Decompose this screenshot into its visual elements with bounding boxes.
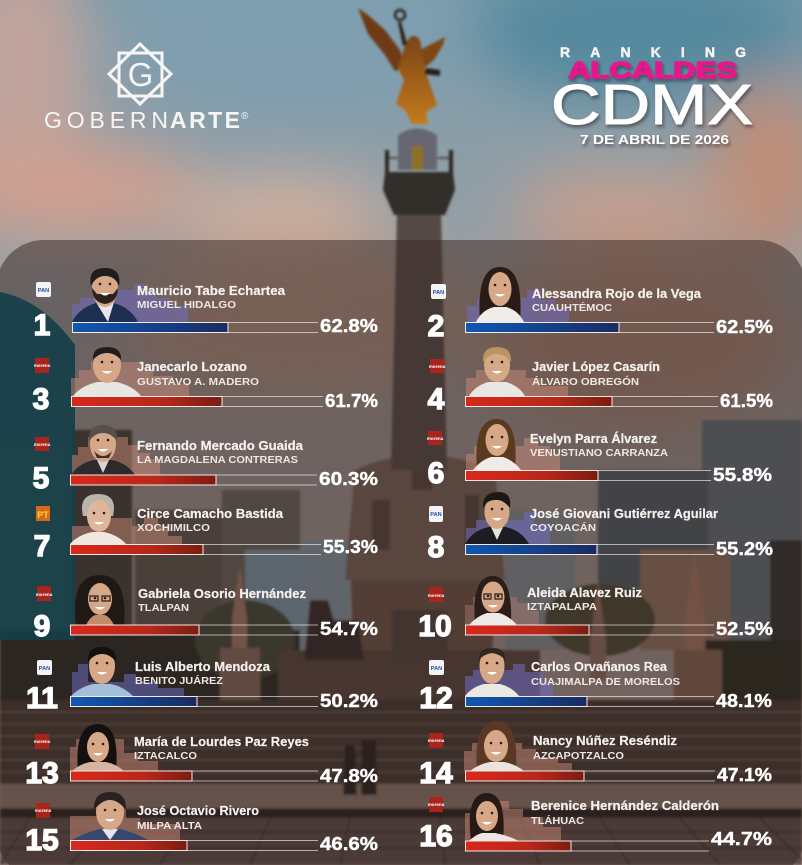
portrait — [75, 575, 124, 625]
candidate 12: Carlos Orvañanos Rea — [419, 648, 772, 715]
trees and obelisks — [0, 559, 802, 702]
party logo Morena — [36, 586, 53, 601]
candidate 4: Javier López Casarín: 4 — [428, 383, 445, 416]
bar 55.2% — [465, 544, 714, 554]
candidate 10: Aleida Alavez Ruiz: IZTAPALAPA — [527, 601, 597, 613]
bar 55.8% — [465, 470, 711, 480]
candidate 4: Javier López Casarín: 61.5% — [720, 391, 773, 411]
candidate 10: Aleida Alavez Ruiz: 52.5% — [716, 619, 773, 639]
candidate 9: Gabriela Osorio Hernández: Gabriela Osorio Hernández — [138, 587, 306, 601]
bar 50.2% — [70, 696, 318, 706]
portrait — [466, 419, 560, 470]
bar 61.5% — [465, 396, 718, 406]
candidate 10: Aleida Alavez Ruiz: Aleida Alavez Ruiz — [527, 586, 642, 600]
candidate 7: Circe Camacho Bastida: 55.3% — [323, 537, 378, 557]
city buildings — [75, 419, 802, 652]
candidate 14: Nancy Núñez Reséndiz: 47.1% — [717, 765, 772, 785]
candidate 3: Janecarlo Lozano: 61.7% — [325, 391, 378, 411]
portrait — [71, 647, 184, 696]
bar 52.5% — [465, 625, 714, 635]
candidate 3: Janecarlo Lozano — [33, 347, 378, 416]
party logo Morena: morena — [428, 738, 445, 743]
candidate 11: Luis Alberto Mendoza: Luis Alberto Mendoza — [135, 660, 271, 674]
candidate 11: Luis Alberto Mendoza: 11 — [26, 682, 58, 715]
bar 46.6% — [70, 840, 318, 850]
candidate 1: Mauricio Tabe Echartea — [34, 268, 378, 342]
bar 62.5% — [465, 322, 714, 332]
portrait — [465, 793, 561, 841]
steps and plaza — [0, 700, 802, 865]
Winged Victory statue — [358, 8, 445, 124]
party logo Morena: morena — [36, 592, 53, 597]
candidate 4: Javier López Casarín: Javier López Casarín — [532, 360, 660, 374]
portrait — [70, 494, 182, 544]
candidate 5: Fernando Mercado Guaida: 5 — [33, 462, 49, 495]
candidate 6: Evelyn Parra Álvarez: Evelyn Parra Álvarez — [530, 431, 657, 446]
candidate 1: Mauricio Tabe Echartea: 62.8% — [320, 316, 378, 336]
monument base — [278, 440, 540, 700]
candidate 5: Fernando Mercado Guaida: 60.3% — [319, 469, 378, 489]
candidate 8: José Giovani Gutiérrez Aguilar — [428, 492, 773, 564]
candidate 14: Nancy Núñez Reséndiz: Nancy Núñez Reséndiz — [533, 734, 677, 748]
candidate 16: Berenice Hernández Calderón: 44.7% — [711, 829, 772, 849]
party logo PAN — [37, 660, 52, 675]
candidate 15: José Octavio Rivero: MILPA ALTA — [137, 820, 202, 832]
portrait — [70, 792, 180, 840]
party logo Morena — [34, 734, 51, 749]
title: Ranking Alcaldes CDMX: ALCALDES — [568, 57, 737, 83]
candidate 10: Aleida Alavez Ruiz — [418, 576, 773, 643]
candidate 12: Carlos Orvañanos Rea: Carlos Orvañanos Rea — [531, 660, 668, 674]
candidate 15: José Octavio Rivero: José Octavio Rivero — [137, 804, 259, 818]
bar 60.3% — [70, 475, 317, 485]
party logo Morena: morena — [35, 808, 52, 813]
title: Ranking Alcaldes CDMX: CDMX — [551, 73, 753, 137]
wordmark: ® — [241, 111, 249, 122]
portrait — [465, 492, 550, 544]
candidate 6: Evelyn Parra Álvarez: VENUSTIANO CARRANZA — [530, 447, 668, 459]
candidate 9: Gabriela Osorio Hernández: 9 — [34, 610, 50, 643]
candidate 7: Circe Camacho Bastida: Circe Camacho Bastida — [137, 507, 284, 521]
party logo PAN: PAN — [431, 666, 442, 672]
candidate 3: Janecarlo Lozano: GUSTAVO A. MADERO — [137, 376, 259, 388]
title: Ranking Alcaldes CDMX: RANKING — [560, 44, 746, 60]
candidate 2: Alessandra Rojo de la Vega — [428, 267, 773, 343]
bar 47.1% — [465, 771, 715, 781]
candidate 6: Evelyn Parra Álvarez: 6 — [428, 457, 444, 490]
candidate 13: María de Lourdes Paz Reyes: IZTACALCO — [134, 750, 197, 762]
candidate 12: Carlos Orvañanos Rea: 48.1% — [716, 691, 772, 711]
candidate 2: Alessandra Rojo de la Vega: Alessandra Rojo de la Vega — [532, 287, 702, 301]
title: Ranking Alcaldes CDMX: 7 DE ABRIL DE 2026 — [580, 132, 729, 147]
wordmark — [44, 107, 249, 133]
candidate 15: José Octavio Rivero: 46.6% — [320, 834, 378, 854]
bar 48.1% — [465, 696, 714, 706]
candidate 8: José Giovani Gutiérrez Aguilar: 55.2% — [716, 539, 773, 559]
party logo PT: PT — [37, 510, 49, 520]
candidate 12: Carlos Orvañanos Rea: CUAJIMALPA DE MORELOS — [531, 676, 680, 688]
portrait — [467, 267, 569, 322]
party logo Morena — [427, 431, 444, 445]
candidate 3: Janecarlo Lozano: 3 — [33, 383, 49, 416]
candidate 4: Javier López Casarín — [428, 347, 773, 416]
wordmark: GOBERN — [44, 107, 168, 133]
candidate 16: Berenice Hernández Calderón — [419, 793, 772, 853]
candidate 14: Nancy Núñez Reséndiz — [419, 721, 772, 790]
candidate 1: Mauricio Tabe Echartea: MIGUEL HIDALGO — [137, 299, 236, 311]
party logo Morena — [428, 797, 445, 812]
candidate 16: Berenice Hernández Calderón: Berenice Hernández Calderón — [531, 799, 719, 813]
icon: diamond G emblem — [109, 44, 171, 104]
candidate 5: Fernando Mercado Guaida: Fernando Mercado Guaida — [137, 439, 304, 453]
candidate 16: Berenice Hernández Calderón: 16 — [419, 820, 453, 853]
portrait — [70, 724, 178, 771]
candidate 6: Evelyn Parra Álvarez: 55.8% — [713, 465, 772, 485]
party logo Morena — [34, 437, 51, 451]
party logo PAN — [431, 284, 446, 299]
candidate 1: Mauricio Tabe Echartea: 1 — [34, 309, 50, 342]
party logo PT — [36, 506, 50, 521]
candidate 9: Gabriela Osorio Hernández: 54.7% — [320, 619, 378, 639]
logo: Gobernarte — [44, 44, 249, 133]
monument column — [383, 128, 455, 470]
candidate 2: Alessandra Rojo de la Vega: 2 — [428, 310, 444, 343]
panel: translucent rankings background — [0, 240, 802, 865]
candidate 12: Carlos Orvañanos Rea: 12 — [419, 682, 453, 715]
party logo Morena — [34, 358, 51, 373]
party logo Morena: morena — [429, 364, 446, 369]
party logo Morena — [428, 733, 445, 748]
candidate 1: Mauricio Tabe Echartea: Mauricio Tabe Echartea — [137, 284, 286, 298]
candidate 15: José Octavio Rivero — [25, 792, 378, 857]
candidate 13: María de Lourdes Paz Reyes: 47.8% — [320, 766, 378, 786]
candidate 16: Berenice Hernández Calderón: TLÁHUAC — [531, 814, 584, 827]
party logo PAN: PAN — [38, 288, 49, 294]
portrait — [71, 425, 160, 475]
candidate 7: Circe Camacho Bastida: 7 — [34, 530, 50, 563]
party logo Morena — [429, 359, 446, 373]
party logo Morena: morena — [428, 593, 445, 598]
candidate 11: Luis Alberto Mendoza: BENITO JUÁREZ — [135, 674, 224, 687]
party logo PAN: PAN — [39, 666, 50, 672]
party logo Morena: morena — [34, 363, 51, 368]
party logo Morena: morena — [428, 802, 445, 807]
candidate 14: Nancy Núñez Reséndiz: 14 — [419, 757, 453, 790]
bar 54.7% — [70, 625, 318, 635]
candidate 6: Evelyn Parra Álvarez — [427, 419, 772, 490]
portrait — [72, 268, 188, 322]
bar 47.8% — [70, 771, 318, 781]
party logo PAN — [429, 660, 444, 675]
title: Ranking Alcaldes CDMX — [551, 44, 753, 147]
left teal tower — [0, 292, 75, 640]
candidate 8: José Giovani Gutiérrez Aguilar: COYOACÁN — [530, 521, 596, 534]
portrait — [464, 721, 572, 771]
bar 44.7% — [465, 841, 709, 851]
candidate 8: José Giovani Gutiérrez Aguilar: José Giovani Gutiérrez Aguilar — [530, 507, 718, 521]
candidate 10: Aleida Alavez Ruiz: 10 — [418, 610, 452, 643]
candidate 8: José Giovani Gutiérrez Aguilar: 8 — [428, 531, 444, 564]
portrait — [466, 347, 568, 396]
bar 55.3% — [70, 544, 321, 554]
candidate 14: Nancy Núñez Reséndiz: AZCAPOTZALCO — [533, 750, 624, 762]
portrait — [465, 576, 539, 625]
candidate 11: Luis Alberto Mendoza: 50.2% — [320, 691, 378, 711]
candidate 5: Fernando Mercado Guaida: LA MAGDALENA CONTRERAS — [137, 454, 298, 466]
candidate 5: Fernando Mercado Guaida — [33, 425, 378, 495]
candidate 13: María de Lourdes Paz Reyes: María de Lourdes Paz Reyes — [134, 735, 309, 749]
candidate 3: Janecarlo Lozano: Janecarlo Lozano — [137, 360, 247, 374]
candidate 13: María de Lourdes Paz Reyes: 13 — [25, 757, 59, 790]
party logo Morena: morena — [34, 442, 51, 447]
bar 62.8% — [72, 322, 318, 332]
icon: diamond G emblem: G — [128, 56, 153, 93]
party logo PAN — [429, 506, 443, 522]
party logo Morena — [35, 803, 52, 818]
candidate 7: Circe Camacho Bastida: XOCHIMILCO — [137, 522, 210, 534]
candidate 9: Gabriela Osorio Hernández: TLALPAN — [138, 602, 189, 614]
candidate 2: Alessandra Rojo de la Vega: CUAUHTÉMOC — [532, 301, 612, 314]
party logo Morena — [428, 587, 445, 602]
portrait — [465, 648, 553, 696]
portrait — [71, 347, 189, 396]
party logo Morena: morena — [34, 739, 51, 744]
wordmark: ARTE — [170, 107, 240, 133]
party logo PAN: PAN — [430, 512, 442, 518]
candidate 13: María de Lourdes Paz Reyes — [25, 724, 378, 790]
bar 61.7% — [71, 396, 323, 406]
candidate 11: Luis Alberto Mendoza — [26, 647, 378, 715]
candidate 4: Javier López Casarín: ÁLVARO OBREGÓN — [532, 375, 639, 388]
candidate 15: José Octavio Rivero: 15 — [25, 824, 59, 857]
candidate 7: Circe Camacho Bastida — [34, 494, 378, 563]
candidate 9: Gabriela Osorio Hernández — [34, 575, 378, 643]
party logo PAN: PAN — [433, 290, 444, 296]
party logo Morena: morena — [427, 436, 444, 441]
candidate 2: Alessandra Rojo de la Vega: 62.5% — [716, 317, 773, 337]
party logo PAN — [36, 282, 51, 297]
